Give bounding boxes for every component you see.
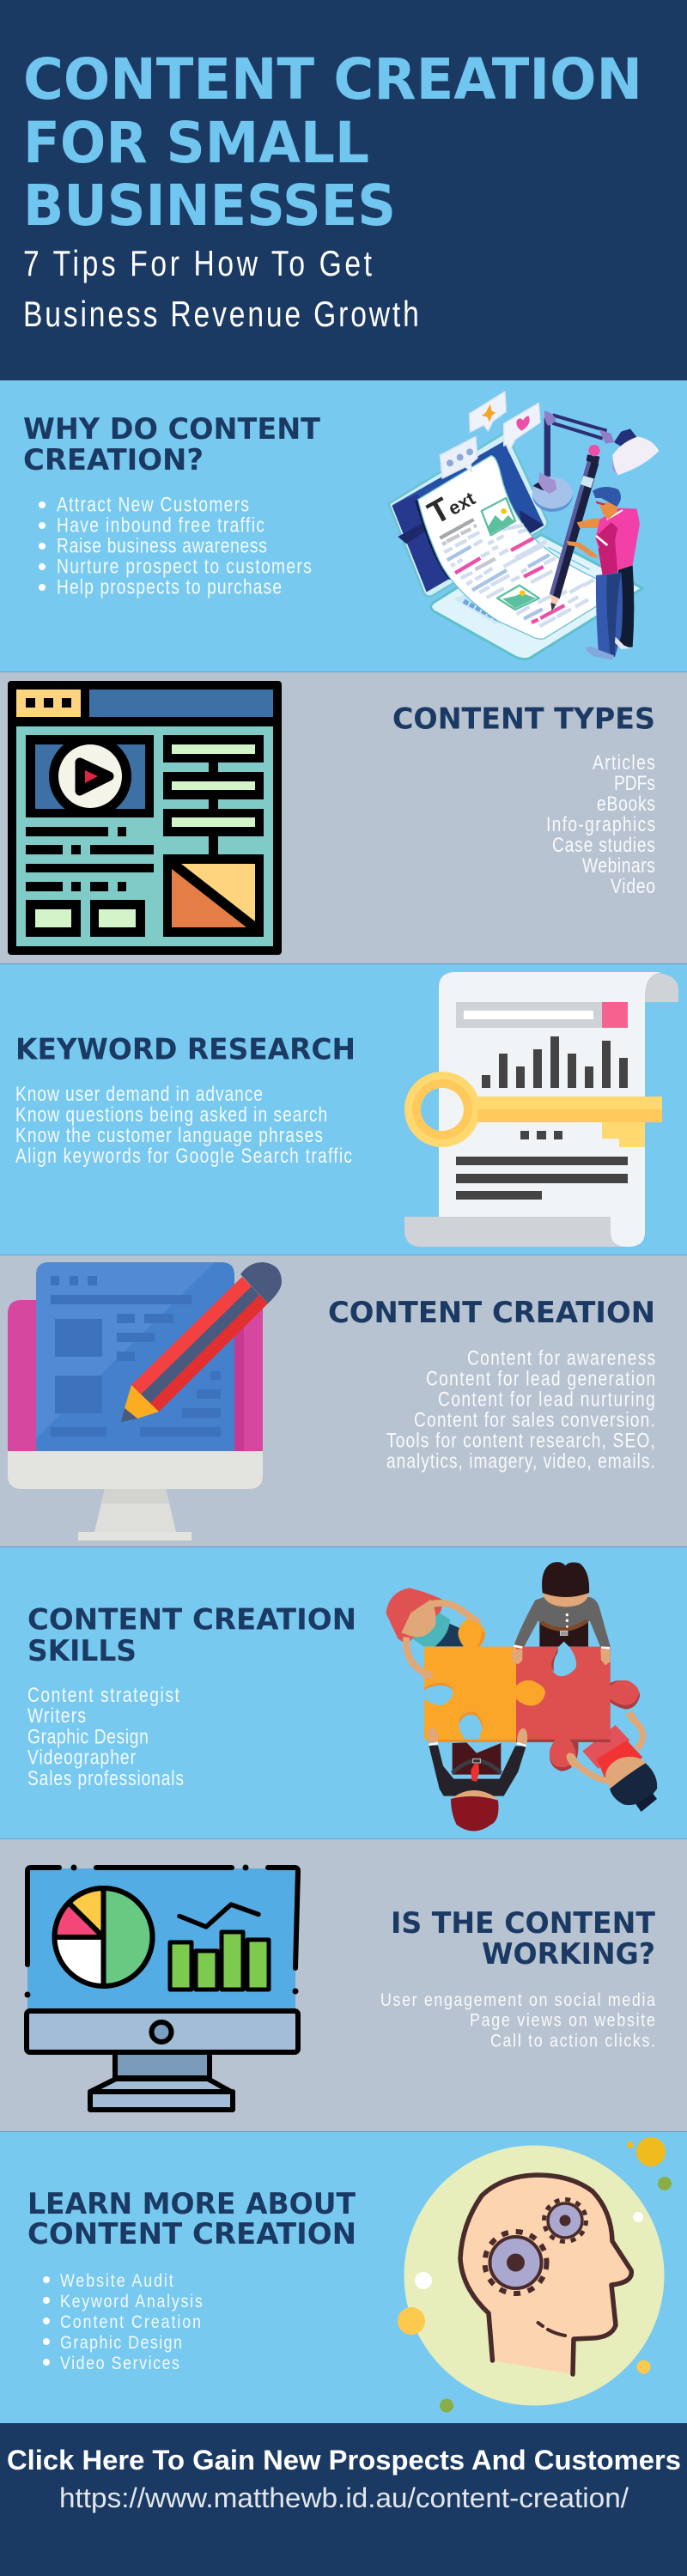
heading: is the content working: IS THE CONTENT	[391, 1906, 656, 1941]
illustration label text: Text	[422, 477, 481, 532]
heading: keyword research: KEYWORD RESEARCH	[15, 1032, 356, 1066]
list: content creation: Content for lead generation	[426, 1366, 655, 1390]
panel: content creation skills	[0, 1546, 687, 1839]
bullet list: services: Graphic Design	[60, 2333, 182, 2353]
list: content types: PDFs	[614, 771, 655, 795]
panel: learn more	[0, 2131, 687, 2423]
icon: web page layout with video	[8, 681, 282, 955]
list: measures	[380, 1990, 655, 2051]
list: content creation: Content for lead nurturing	[438, 1387, 655, 1411]
heading: content creation skills	[27, 1602, 356, 1668]
bullet list: reasons: Attract New Customers	[57, 492, 249, 516]
heading: content creation skills: SKILLS	[27, 1634, 137, 1668]
title: CONTENT CREATION	[23, 46, 642, 112]
line chart	[179, 1905, 258, 1927]
title	[23, 46, 642, 239]
list: measures: User engagement on social media	[380, 1990, 655, 2010]
call to action: Click Here To Gain New Prospects And Customers	[7, 2445, 681, 2476]
bullet list: services: Website Audit	[60, 2271, 173, 2291]
pie chart	[55, 1888, 153, 1986]
icon: analytics monitor	[24, 1865, 299, 2110]
giant pencil	[550, 445, 600, 611]
icon: desktop monitor with pencil	[8, 1262, 282, 1540]
bullet list: services: Keyword Analysis	[60, 2292, 203, 2312]
list: content types: Case studies	[552, 833, 655, 857]
title: BUSINESSES	[23, 173, 396, 239]
icon: document with key	[404, 972, 678, 1247]
person: lower right	[571, 1715, 657, 1812]
panel: content types	[0, 671, 687, 964]
list: skills	[27, 1683, 184, 1790]
illustration: man writing on giant laptop page	[389, 392, 659, 659]
subtitle: Business Revenue Growth	[23, 295, 419, 335]
heading: learn more	[27, 2187, 356, 2251]
bullet list: reasons: Raise business awareness	[57, 533, 267, 557]
list: skills: Sales professionals	[27, 1766, 184, 1790]
list: content types: Info-graphics	[546, 812, 655, 836]
panel: header	[0, 0, 687, 380]
bar chart	[170, 1932, 269, 1990]
list: skills: Content strategist	[27, 1683, 179, 1707]
person: top	[514, 1562, 611, 1647]
bullet list: reasons: Help prospects to purchase	[57, 574, 282, 598]
list: content types: Webinars	[582, 854, 655, 878]
list: content types: Video	[611, 874, 655, 898]
desk lamp	[532, 410, 659, 512]
list: skills: Videographer	[27, 1745, 136, 1769]
hands	[421, 1616, 637, 1767]
list: keyword research: Align keywords for Google Search traffic	[15, 1144, 352, 1168]
heading: why do content creation: WHY DO CONTENT	[23, 412, 321, 447]
list: keyword research: Know user demand in advance	[15, 1082, 263, 1106]
bullet list: reasons	[39, 492, 312, 598]
panel: footer call to action	[0, 2423, 687, 2576]
panel: is the content working	[0, 1838, 687, 2132]
heading: is the content working: WORKING?	[482, 1937, 655, 1971]
icon: head with gears	[398, 2137, 672, 2413]
list: skills: Writers	[27, 1704, 86, 1728]
illustration: four people holding puzzle pieces	[386, 1562, 657, 1831]
list: content types: eBooks	[597, 792, 655, 816]
heading: why do content creation	[23, 412, 321, 477]
url: https://www.matthewb.id.au/content-creation/	[59, 2482, 629, 2513]
heading: why do content creation: CREATION?	[23, 443, 204, 477]
list: content types	[546, 750, 655, 898]
list: content creation: Content for sales conversion.	[414, 1407, 655, 1431]
list: content creation: analytics, imagery, video, emails.	[386, 1449, 655, 1473]
list: skills: Graphic Design	[27, 1724, 149, 1748]
heading: content creation skills: CONTENT CREATION	[27, 1602, 356, 1637]
heading: learn more: LEARN MORE ABOUT	[27, 2187, 356, 2221]
list: keyword research: Know questions being asked in search	[15, 1103, 327, 1127]
heading: content types: CONTENT TYPES	[392, 702, 655, 737]
puzzle piece: red	[516, 1642, 640, 1771]
heading: learn more: CONTENT CREATION	[27, 2217, 356, 2251]
list: content types: Articles	[593, 750, 655, 775]
list: measures: Call to action clicks.	[490, 2031, 655, 2051]
list: keyword research	[15, 1082, 352, 1168]
title: FOR SMALL	[23, 110, 369, 176]
person: upper left	[386, 1588, 479, 1679]
panel: content creation	[0, 1255, 687, 1547]
subtitle	[23, 245, 419, 335]
list: content creation	[386, 1346, 655, 1473]
bullet list: services	[43, 2271, 203, 2373]
list: measures: Page views on website	[470, 2010, 655, 2031]
person: bottom	[429, 1742, 526, 1831]
heading: is the content working	[391, 1906, 656, 1971]
list: keyword research: Know the customer language phrases	[15, 1123, 323, 1147]
panel: keyword research	[0, 963, 687, 1255]
list: content creation: Content for awareness	[467, 1346, 655, 1370]
heading: content creation: CONTENT CREATION	[328, 1296, 655, 1330]
bullet list: reasons: Nurture prospect to customers	[57, 554, 312, 578]
puzzle piece: orange	[424, 1619, 545, 1742]
gear: large	[484, 2232, 546, 2293]
bullet list: services: Video Services	[60, 2354, 179, 2373]
subtitle: 7 Tips For How To Get	[23, 245, 372, 284]
gear: small	[544, 2200, 586, 2241]
list: content creation: Tools for content research, SEO,	[386, 1428, 655, 1452]
panel: why do content creation	[0, 380, 687, 672]
man figure	[567, 487, 640, 659]
bullet list: reasons: Have inbound free traffic	[57, 513, 264, 537]
bullet list: services: Content Creation	[60, 2312, 201, 2332]
